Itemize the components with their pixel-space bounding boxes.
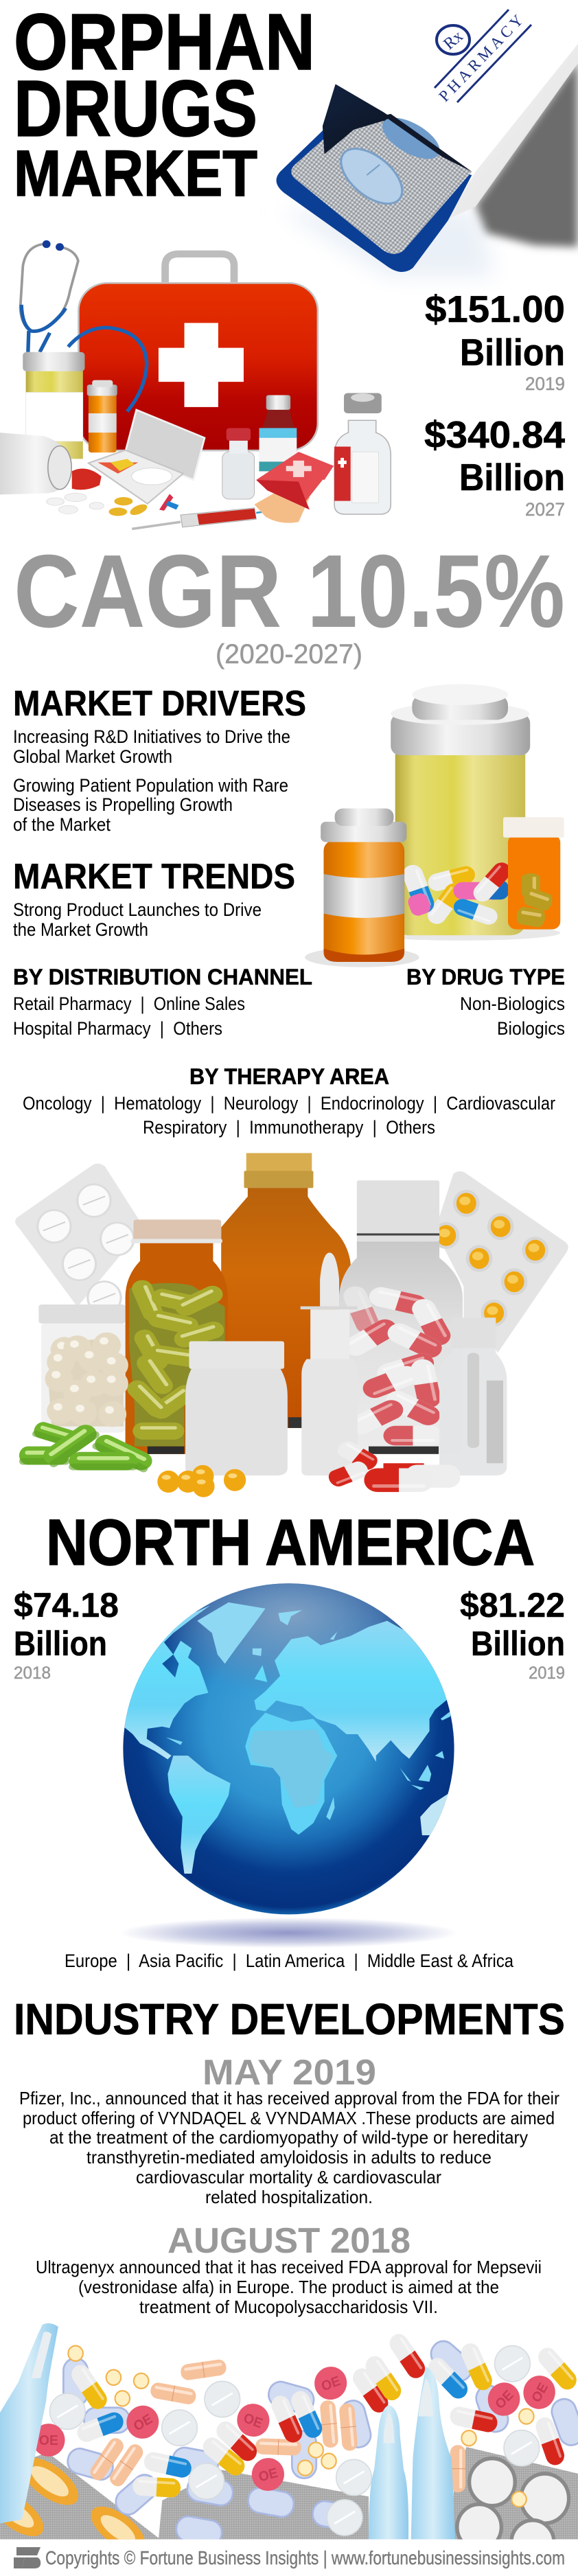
illustration: pill bottles [305, 684, 564, 967]
stat: north america 2018: 2018 [14, 1664, 51, 1683]
left amber jar [123, 1219, 228, 1454]
white bottle on side [0, 433, 72, 494]
stat: market size 2027: 2027 [525, 499, 565, 520]
panel: by drug type: Biologics [497, 1018, 565, 1039]
title: DRUGS [14, 64, 257, 153]
panel: market trends: Strong Product Launches to Drive [13, 899, 262, 920]
stamp: pharmacy: Rx [441, 27, 467, 54]
stat: north america 2018 [14, 1586, 119, 1683]
title: MARKET [14, 137, 257, 210]
stat: north america 2018: Billion [14, 1624, 107, 1663]
panel: by drug type: BY DRUG TYPE [406, 965, 565, 989]
syringe [132, 508, 266, 529]
development: august 2018: AUGUST 2018 [167, 2221, 411, 2261]
stat: north america 2019: 2019 [529, 1664, 565, 1683]
large yellow jar [395, 754, 525, 935]
development: may 2019: at the treatment of the cardiomyopathy of wild-type or hereditary [49, 2127, 528, 2148]
panel: by therapy area: Respiratory | Immunotherapy | Others [143, 1117, 435, 1138]
development: may 2019: transthyretin-mediated amyloidosis in adults to reduce [86, 2147, 492, 2167]
red syrup bottle [259, 409, 297, 471]
nasal spray [301, 1253, 358, 1475]
panel: market trends: MARKET TRENDS [13, 857, 295, 897]
glass vial [222, 452, 255, 499]
development: may 2019: related hospitalization. [205, 2187, 373, 2207]
stat: market size 2019: Billion [460, 331, 565, 373]
stat: north america 2019: Billion [471, 1624, 565, 1663]
big white bottle with capsules [339, 1180, 463, 1454]
stat: market size 2019 [425, 288, 565, 394]
development: may 2019: MAY 2019 [203, 2053, 376, 2093]
panel: by distribution channel: Retail Pharmacy | Online Sales [13, 993, 245, 1014]
red discs [32, 2362, 561, 2494]
panel: by therapy area: BY THERAPY AREA [189, 1064, 389, 1089]
left blister [15, 1164, 143, 1315]
panel: market trends [13, 857, 295, 940]
stat: market size 2027: $340.84 [424, 413, 565, 456]
ampoules [0, 2323, 455, 2540]
dropper bottle [439, 1273, 507, 1475]
stat: north america 2018: $74.18 [14, 1586, 119, 1624]
stat: north america 2019 [460, 1586, 565, 1683]
gold beads [68, 2346, 534, 2507]
panel: by drug type [406, 965, 565, 1039]
stat: market size 2027: Billion [459, 456, 565, 498]
white bottle [185, 1342, 288, 1475]
stat: market size 2027 [424, 413, 565, 520]
pill box [126, 410, 205, 480]
development: august 2018 [36, 2221, 542, 2317]
red and white capsules [325, 1438, 460, 1492]
blister packs [0, 2447, 578, 2540]
panel: market drivers [13, 684, 306, 835]
panel: market drivers: of the Market [13, 814, 111, 835]
development: august 2018: Ultragenyx announced that it has received FDA approval for Mepsevii [36, 2257, 542, 2277]
bandage box [255, 483, 310, 523]
panel: by therapy area [23, 1064, 555, 1138]
softgels [157, 1465, 246, 1497]
illustration: scattered pills and ampoules [0, 2323, 578, 2540]
icon: globe [123, 1583, 454, 1947]
white jar with pearls [38, 1304, 128, 1433]
stat: market size 2019: 2019 [525, 373, 565, 394]
panel: market trends: the Market Growth [13, 919, 148, 940]
panel: market drivers: MARKET DRIVERS [13, 684, 306, 724]
lilac oval tablets [63, 2336, 578, 2547]
stat: market size 2019: $151.00 [425, 288, 565, 330]
kit case [78, 283, 318, 450]
large pill bottle [26, 368, 83, 459]
panel: market drivers: Increasing R&D Initiatives to Drive the [13, 726, 290, 747]
illustration: pharmacy box with blister pack [277, 10, 578, 277]
tablets and softgels [47, 493, 178, 517]
panel: by distribution channel: BY DISTRIBUTION CHANNEL [13, 965, 312, 989]
small orange bottle [323, 840, 404, 961]
text: other regions: Europe | Asia Pacific | Latin America | Middle East & Africa [65, 1951, 514, 1971]
kit cross [159, 323, 244, 407]
panel: market drivers: Global Market Growth [13, 746, 172, 767]
title [14, 0, 315, 210]
illustration: medicine bottles and blisters [15, 1153, 568, 1497]
CAGR headline: (2020-2027) [216, 639, 362, 669]
right blister [432, 1171, 568, 1353]
panel: by drug type: Non-Biologics [460, 993, 565, 1014]
development: august 2018: (vestronidase alfa) in Europe. The product is aimed at the [78, 2277, 499, 2297]
peach capsules [87, 2358, 465, 2492]
panel: market drivers: Diseases is Propelling Growth [13, 794, 233, 815]
large amber bottle [221, 1153, 351, 1428]
development: august 2018: treatment of Mucopolysaccharidosis VII. [139, 2297, 438, 2317]
panel: market drivers: Growing Patient Population with Rare [13, 775, 288, 796]
panel: by distribution channel: Hospital Pharmacy | Others [13, 1018, 222, 1039]
icon: fortune business insights logo [14, 2547, 41, 2568]
stethoscope [21, 240, 147, 411]
capsules in jar [400, 859, 515, 928]
panel: by distribution channel [13, 965, 312, 1039]
capsules [68, 2330, 578, 2498]
white tablets [49, 2346, 540, 2535]
stat: north america 2019: $81.22 [460, 1586, 565, 1624]
kit handle [165, 254, 234, 283]
development: may 2019 [19, 2053, 559, 2207]
development: may 2019: cardiovascular mortality & cardiovascular [136, 2167, 441, 2187]
small orange bottle [89, 392, 117, 452]
stamp: pharmacy: PHARMACY [435, 11, 527, 105]
large vial [334, 420, 391, 514]
green capsules [19, 1420, 156, 1473]
illustration: first aid kit and medicines [0, 240, 391, 529]
right orange bottle [508, 835, 560, 930]
